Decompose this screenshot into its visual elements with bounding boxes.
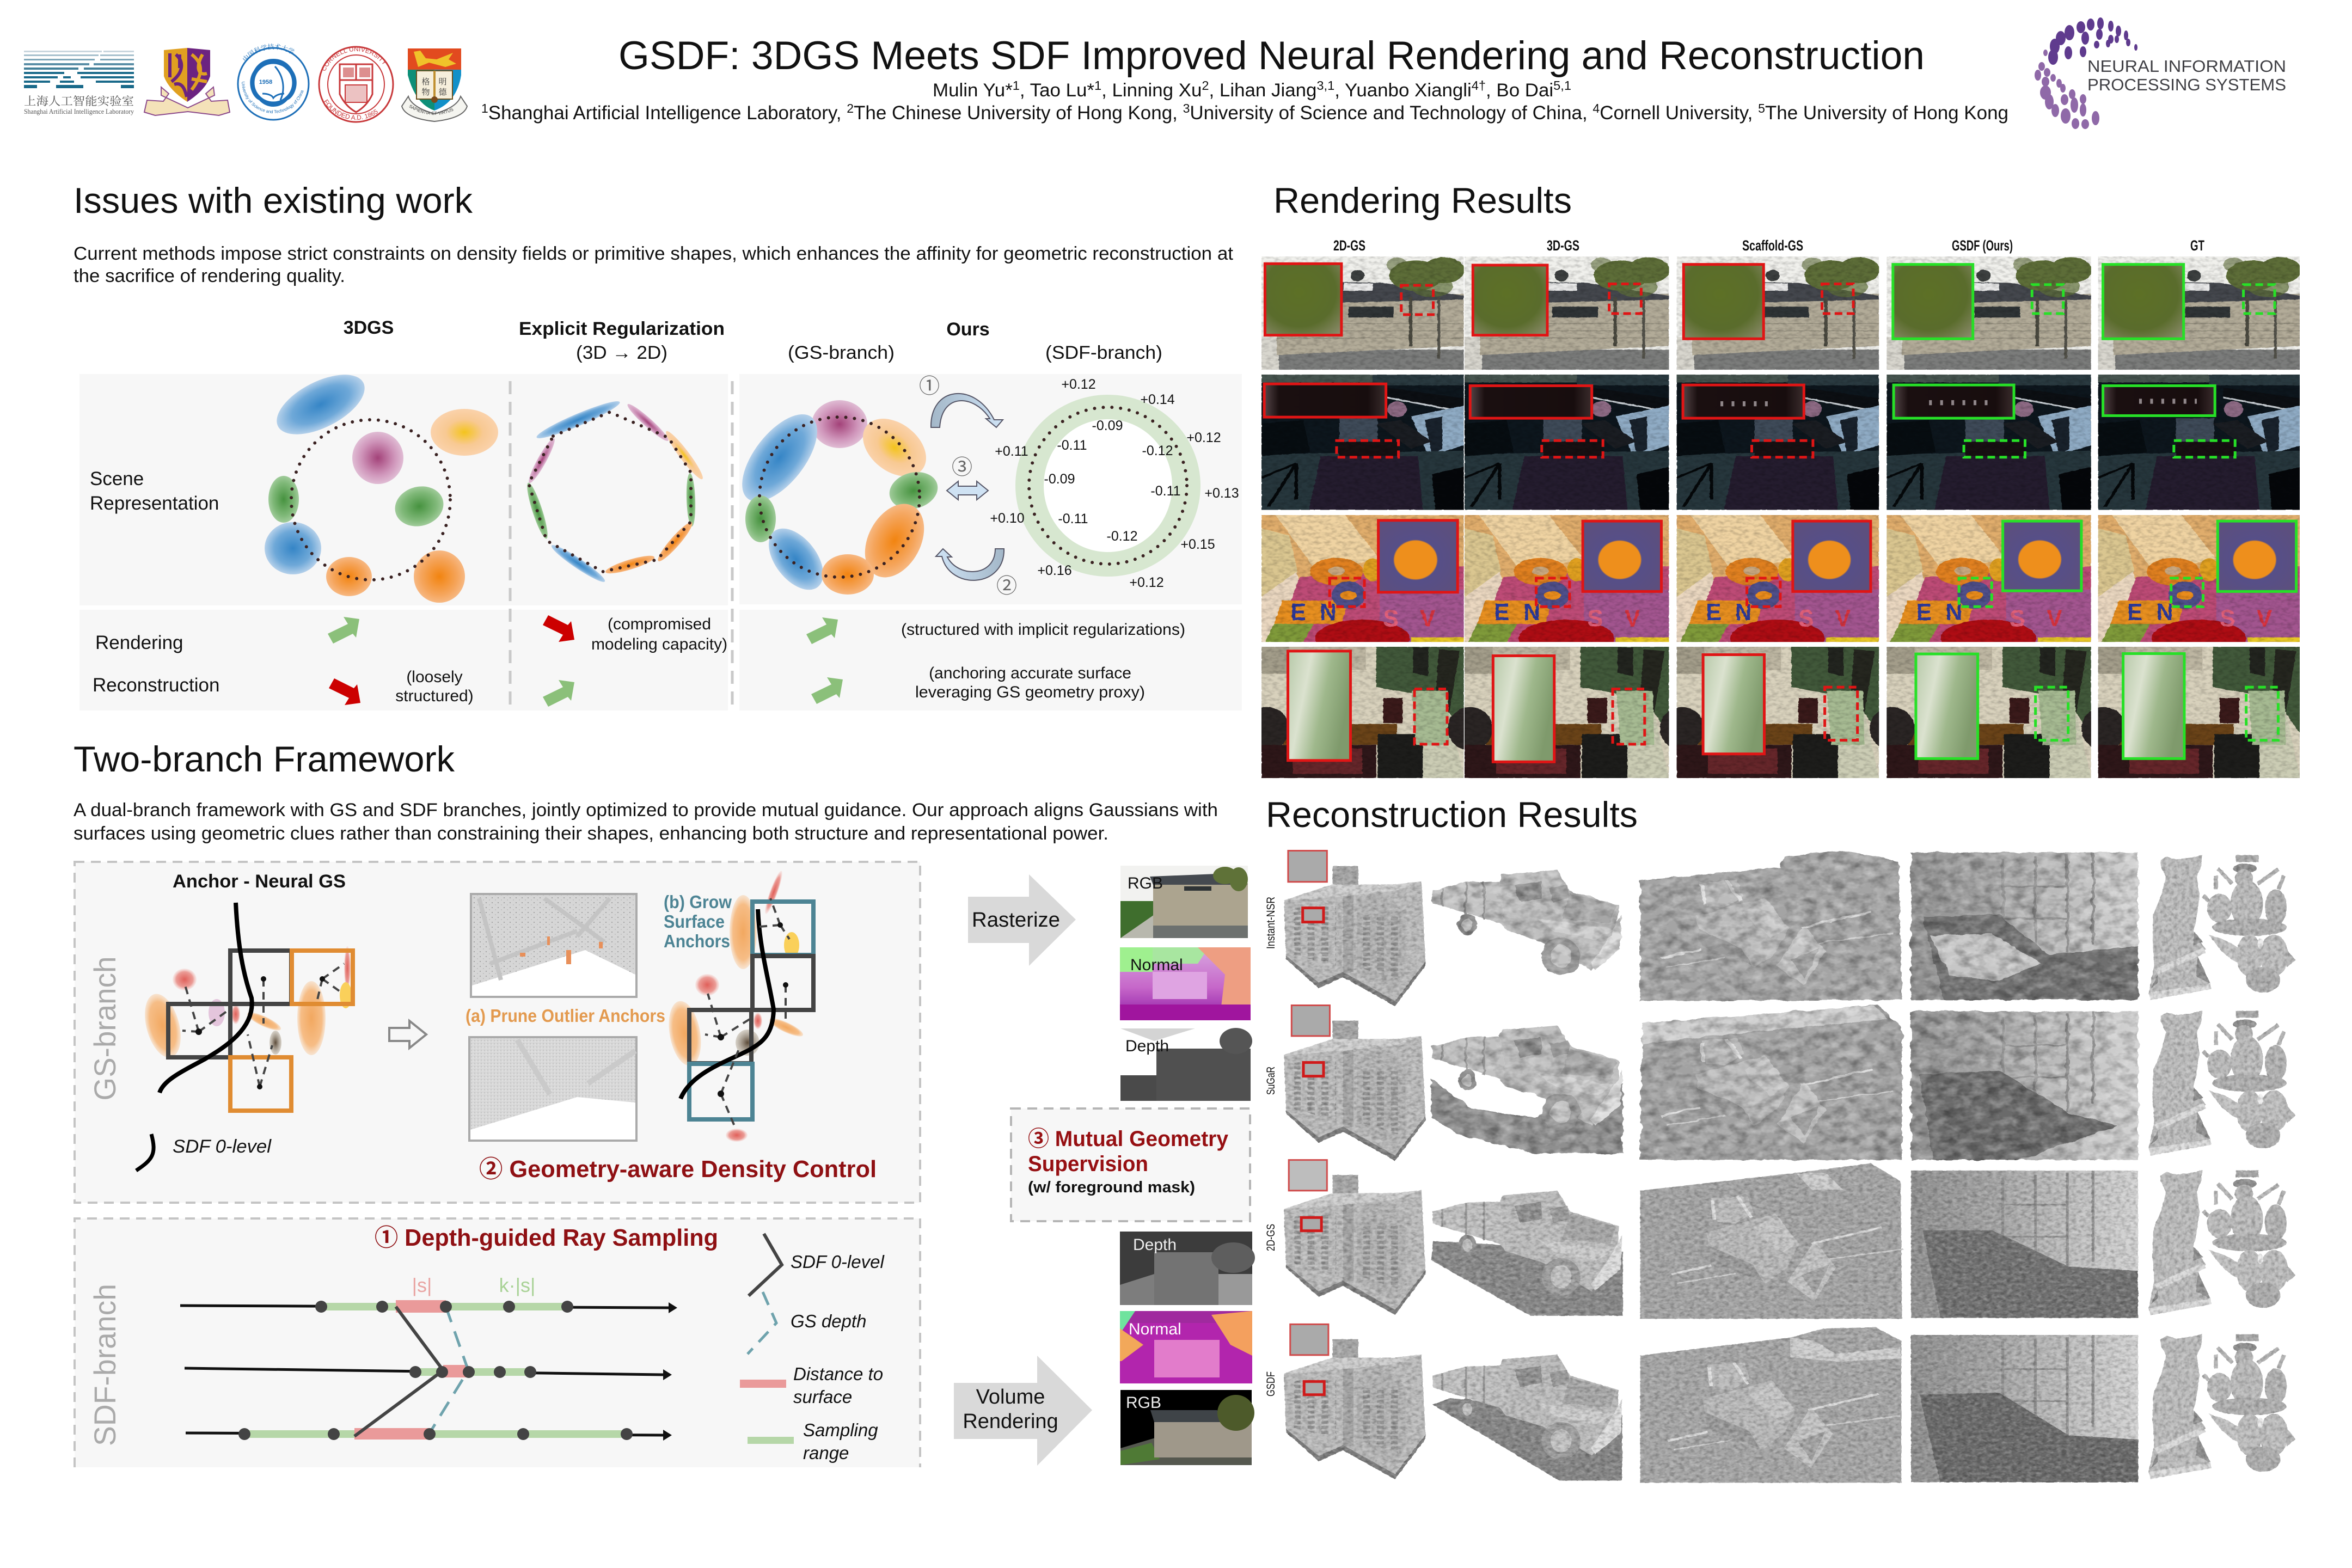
panel: rendering comparison grid [1245,237,2301,778]
diagram: rays [180,1300,677,1443]
authors: 1 [1013,78,1020,93]
heading: Rendering Results: Rendering Results [1273,180,1572,220]
row: 2D-GS [1284,1160,2138,1319]
diagram: SDF ring: -0.11 [1058,511,1088,526]
text block: issues intro: Current methods impose strict constraints on density fields or primitive shapes, which enhances the affinity for geometric reconstruction at [74,243,1234,264]
image: rasterized depth: Depth [1125,1037,1169,1055]
logo: HKU: SAPIENTIA·ET·VIRTUS [408,103,454,116]
image: volume RGB [1120,1390,1254,1465]
heading: depth-guided ray sampling: ① Depth-guided Ray Sampling [375,1224,718,1251]
logo: HKU: 德 [438,86,447,97]
column headings: Ours [946,319,990,340]
column headings [344,317,1162,363]
diagram: SDF ring: +0.12 [1186,430,1221,445]
authors: , Linning Xu [1101,80,1202,101]
logo: USTC: 中国科学技术大学 [243,44,295,61]
logo: Shanghai AI Lab [24,51,134,115]
affiliations: 5 [1758,101,1765,115]
logo: Cornell [319,45,393,122]
diagram: SDF ring: +0.16 [1037,563,1072,578]
authors: , Yuanbo Xiangli [1334,80,1472,101]
diagram: SDF ring: -0.11 [1150,483,1181,499]
authors: 3,1 [1316,78,1334,93]
diagram: SDF ring: -0.09 [1092,418,1123,433]
panel: comparison diagram [79,317,1242,710]
image: rasterized RGB [1120,866,1248,938]
diagram: SDF ring: -0.11 [1057,438,1087,453]
image: point cloud after pruning [469,1037,636,1141]
row labels: GSDF [1265,1371,1277,1396]
label: SDF 0-level: SDF 0-level [173,1136,272,1157]
logo: HKU: 物 [421,86,430,97]
branch label: SDF-branch [88,1284,122,1446]
affiliations: Cornell University, [1600,102,1758,124]
logo: HKU: 格 [421,76,430,87]
column headers: 3D-GS [1547,237,1579,254]
title: GSDF: 3DGS Meets SDF Improved Neural Rendering and Reconstruction [618,34,1925,78]
authors: 4† [1472,78,1486,93]
label: SDF 0-level [136,1134,272,1171]
image: rasterized RGB: RGB [1128,874,1163,892]
row: dark room [1261,375,2300,510]
statues: owl, snowman, birds [2149,855,2296,1479]
logo: USTC [238,42,309,120]
diagram: explicit regularization [524,396,706,585]
labels: s and k s: k·|s| [499,1274,535,1296]
diagram: right anchor grid [664,869,813,1142]
arrow: volume rendering: Volume [976,1386,1045,1408]
row annotations: (anchoring accurate surface [929,664,1131,682]
image: rasterized normal [1120,947,1251,1020]
image: rasterized normal: Normal [1130,956,1183,974]
image: volume depth: Depth [1133,1236,1177,1254]
diagram: SDF ring: -0.12 [1107,529,1137,544]
label: grow surface anchors: Surface [664,911,725,932]
logo: NeurIPS: NEURAL INFORMATION [2087,57,2286,76]
legend: Distance to [793,1364,883,1384]
diagram: SDF ring: -0.12 [1142,443,1173,458]
image: volume depth [1120,1232,1255,1305]
label: grow surface anchors: Anchors [664,931,730,951]
legend: surface [793,1387,852,1407]
row labels: SuGaR [1265,1067,1277,1095]
affiliations: University of Science and Technology of China, [1190,102,1592,124]
diagram: SDF ring: +0.14 [1140,392,1175,407]
circled step numbers: ③ [952,456,972,479]
row annotations: structured) [395,687,474,705]
heading: Two-branch Framework: Two-branch Framework [74,739,455,779]
authors: , Lihan Jiang [1209,80,1316,101]
text block: issues intro: the sacrifice of rendering quality. [74,266,345,286]
callout: mutual geometry supervision: ③ Mutual Geometry [1028,1127,1229,1151]
column headings: Explicit Regularization [519,318,725,339]
row labels: Representation [90,493,219,514]
affiliations: 4 [1592,101,1600,115]
row annotations: (compromised [608,615,711,633]
diagram: left anchor grid [138,903,353,1111]
icons: mutual arrows between branches [931,394,1004,580]
column headers [1333,237,2204,254]
row: Instant-NSR [1284,850,2138,1006]
logo: USTC: 1958 [259,79,272,85]
circled step numbers: ① [919,375,940,398]
row: GSDF [1284,1324,2138,1483]
image: volume normal: Normal [1129,1320,1181,1338]
row labels: Rendering [95,632,183,653]
arrow: rasterize: Rasterize [972,909,1060,932]
authors: 5,1 [1553,78,1571,93]
column headings: (GS-branch) [788,342,895,363]
row labels: Instant-NSR [1265,897,1277,949]
panel: reconstruction comparison grid [1265,850,2296,1483]
panel: GS-branch [75,862,920,1203]
legend: GS depth [791,1311,866,1331]
arrow: volume rendering: Rendering [963,1410,1058,1433]
label: prune outlier anchors: (a) Prune Outlier Anchors [465,1006,665,1026]
row annotations: (loosely [406,668,463,686]
legend: SDF 0-level [791,1252,885,1272]
image: point cloud before pruning [471,894,636,997]
row annotations: leveraging GS geometry proxy) [915,683,1145,701]
affiliations: The Chinese University of Hong Kong, [854,102,1183,124]
row labels: Scene [90,468,144,489]
diagram: ours GS branch [728,400,942,600]
callout: mutual geometry supervision: (w/ foreground mask) [1028,1179,1195,1196]
diagram: SDF ring [990,377,1239,590]
arrow: volume rendering [954,1356,1092,1466]
affiliations: The University of Hong Kong [1765,102,2008,124]
logo: NeurIPS [2035,18,2286,128]
authors: Mulin Yu* [933,80,1010,101]
diagram: SDF ring: +0.10 [990,511,1025,526]
row: SuGaR [1284,1004,2138,1161]
legend: range [803,1443,849,1463]
diagram: SDF ring: +0.12 [1129,575,1164,590]
heading: Issues with existing work: Issues with existing work [74,180,473,220]
label: Anchor - Neural GS: Anchor - Neural GS [173,871,346,892]
logo: Cornell: CORNELL UNIVERSITY [322,48,388,71]
logo: Shanghai AI Lab: 上海人工智能实验室 [24,93,134,109]
arrow: rasterize [968,874,1076,966]
logo: USTC: University of Science and Technology of China [242,82,304,113]
diagram: SDF ring: +0.15 [1180,537,1215,552]
column headings: 3DGS [344,317,394,338]
row annotations: (structured with implicit regularizations) [901,621,1185,639]
column headers: GSDF (Ours) [1952,237,2013,254]
image: rasterized depth [1120,1028,1252,1101]
row: playroom [1261,515,2300,657]
column headers: Scaffold-GS [1742,237,1803,254]
heading: Reconstruction Results: Reconstruction Results [1266,794,1638,835]
affiliations: Shanghai Artificial Intelligence Laboratory, [488,102,847,124]
text block: framework intro: A dual-branch framework with GS and SDF branches, jointly optimized to provide mutual guidance. Our approach aligns Gaussians with [74,800,1218,820]
row labels: 2D-GS [1265,1224,1277,1251]
heading: geometry-aware density control: ② Geometry-aware Density Control [479,1156,877,1183]
photo grid [1245,256,2301,778]
diagram: SDF ring: +0.12 [1061,377,1096,392]
text block: issues intro [74,243,1234,286]
label: grow surface anchors [664,892,732,951]
affiliations: 3 [1183,101,1190,115]
label: grow surface anchors: (b) Grow [664,892,732,912]
logo: Cornell: FOUNDED A.D. 1865 [322,98,379,121]
authors: , Tao Lu* [1020,80,1094,101]
circled step numbers [919,375,1017,598]
labels: s and k s: |s| [412,1274,432,1296]
panel: SDF-branch [75,1218,920,1467]
branch label: GS-branch [88,956,122,1101]
diagram: SDF ring: -0.09 [1044,471,1075,487]
authors: , Bo Dai [1486,80,1553,101]
column headings: (SDF-branch) [1045,342,1162,363]
legend [740,1234,885,1463]
icon: hollow arrow [389,1021,426,1048]
logo: HKU: 明 [438,76,447,87]
logo: CUHK [144,48,230,115]
row: hallway [1245,647,2300,778]
diagram: 3DGS gaussians [265,363,498,603]
row annotations: modeling capacity) [591,635,727,653]
header logos [24,42,467,122]
mesh grid [1284,850,2138,1483]
callout: mutual geometry supervision: Supervision [1028,1152,1148,1176]
logo: HKU [402,48,467,121]
text block: framework intro: surfaces using geometric clues rather than constraining their shapes, enhancing both structure and representational power. [74,823,1108,844]
callout: mutual geometry supervision [1011,1108,1250,1221]
legend: Sampling [803,1420,878,1440]
logo: NeurIPS: PROCESSING SYSTEMS [2087,75,2286,94]
row labels: Reconstruction [93,675,219,696]
row annotations [395,615,1185,705]
column headings: (3D → 2D) [576,342,667,363]
row: garden house [1261,256,2301,370]
logo: Shanghai AI Lab: Shanghai Artificial Intelligence Laboratory [24,107,134,115]
circled step numbers: ② [996,575,1017,598]
diagram: SDF ring: +0.13 [1204,486,1239,501]
trend arrows [328,615,843,707]
panel backgrounds [79,374,1242,710]
affiliations: 2 [847,101,854,115]
affiliations: 1 [481,101,488,115]
column headers: GT [2190,237,2204,254]
diagram: SDF ring: +0.11 [995,444,1028,459]
image: volume normal [1120,1311,1252,1383]
authors: 1 [1094,78,1101,93]
text block: framework intro [74,800,1218,844]
labels: s and k s [412,1274,535,1296]
row labels [1265,897,1277,1396]
row labels [90,468,219,696]
column headers: 2D-GS [1333,237,1365,254]
image: volume RGB: RGB [1126,1394,1161,1412]
authors: 2 [1202,78,1209,93]
